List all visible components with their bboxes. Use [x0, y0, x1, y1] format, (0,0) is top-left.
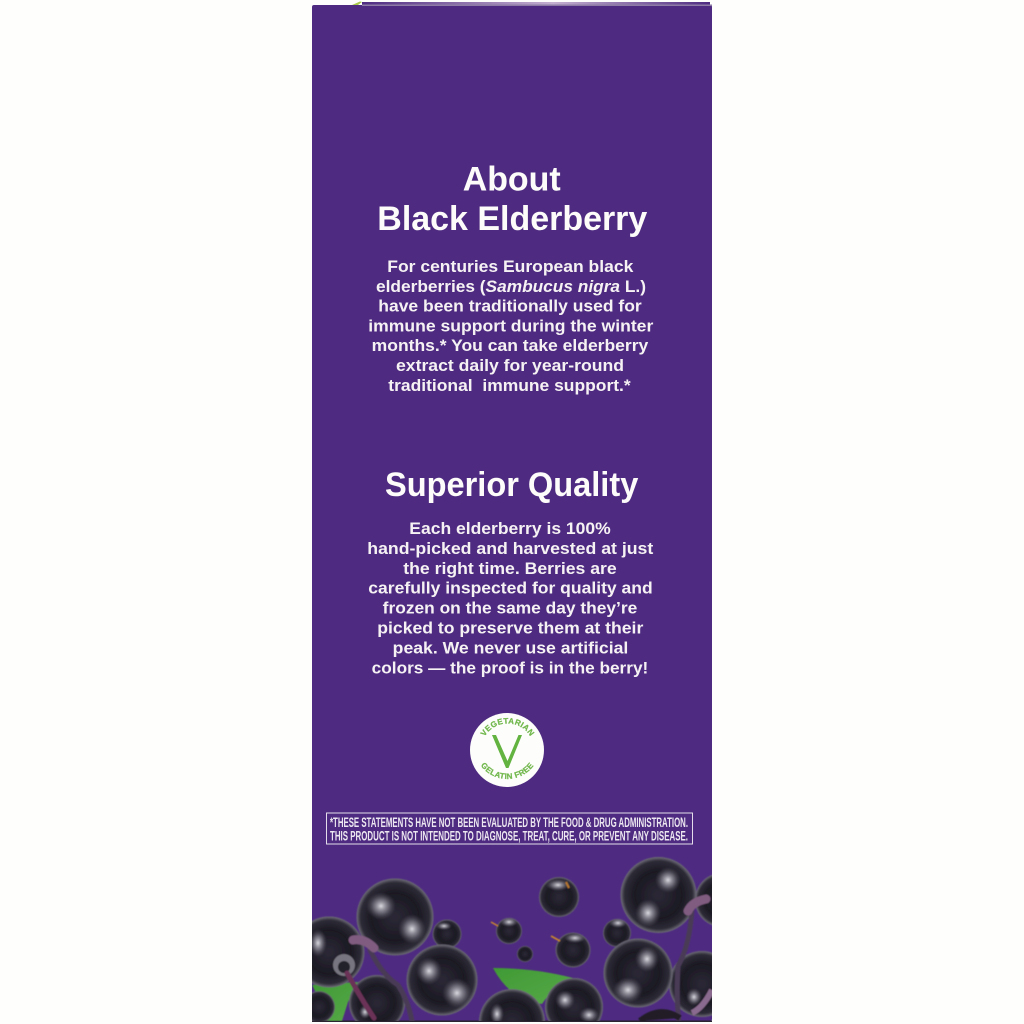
text block: quality paragraph: the right time. Berries are [403, 559, 617, 578]
heading: About Black Elderberry [377, 161, 647, 238]
text block: about paragraph: elderberries (Sambucus nigra L.) [376, 277, 646, 296]
text block: quality paragraph: colors — the proof is in the berry! [372, 658, 648, 677]
icon: vegetarian gelatin free badge: VEGETARIAN [480, 718, 534, 736]
text block: quality paragraph: Each elderberry is 100% [409, 519, 611, 538]
text block: about paragraph [368, 257, 654, 395]
illustration: elderberries and leaves [312, 856, 712, 1021]
icon: left leaf [312, 982, 358, 1021]
text block: about paragraph: immune support during the winter [368, 316, 654, 335]
text block: about paragraph: extract daily for year-round [396, 356, 624, 375]
text block: quality paragraph: peak. We never use artificial [393, 638, 628, 657]
icon: lower centre berries [479, 978, 603, 1024]
text block: quality paragraph: picked to preserve them at their [377, 618, 644, 638]
text block: quality paragraph [367, 519, 654, 677]
text block: about paragraph: For centuries European black [387, 257, 634, 276]
icon: floating berries [491, 877, 631, 968]
callout: FDA disclaimer box [326, 813, 692, 844]
heading: About Black Elderberry: Black Elderberry [377, 200, 647, 238]
heading: About Black Elderberry: About [463, 161, 561, 199]
callout: FDA disclaimer box: THIS PRODUCT IS NOT INTENDED TO DIAGNOSE, TREAT, CURE, OR PREVENT ANY DISEASE. [330, 828, 688, 844]
text block: quality paragraph: carefully inspected for quality and [368, 579, 653, 598]
icon: vegetarian gelatin free badge [470, 713, 544, 787]
heading: Superior Quality: Superior Quality [385, 466, 638, 504]
icon: right berry cluster [603, 856, 712, 1021]
panel: purple box [312, 2, 712, 1022]
text block: about paragraph: months.* You can take elderberry [372, 336, 649, 355]
icon: centre leaf [493, 968, 573, 1004]
text block: about paragraph: have been traditionally used for [378, 297, 642, 316]
text block: quality paragraph: hand-picked and harvested at just [367, 539, 654, 558]
icon: vegetarian gelatin free badge: GELATIN FREE [482, 762, 534, 780]
callout: FDA disclaimer box: *THESE STATEMENTS HAVE NOT BEEN EVALUATED BY THE FOOD & DRUG ADMINISTRATION. [330, 815, 688, 830]
icon: left berry cluster [312, 878, 478, 1021]
text block: quality paragraph: frozen on the same day they’re [383, 599, 637, 618]
icon: left stems [347, 940, 412, 1021]
text block: about paragraph: traditional immune support.* [388, 376, 631, 395]
